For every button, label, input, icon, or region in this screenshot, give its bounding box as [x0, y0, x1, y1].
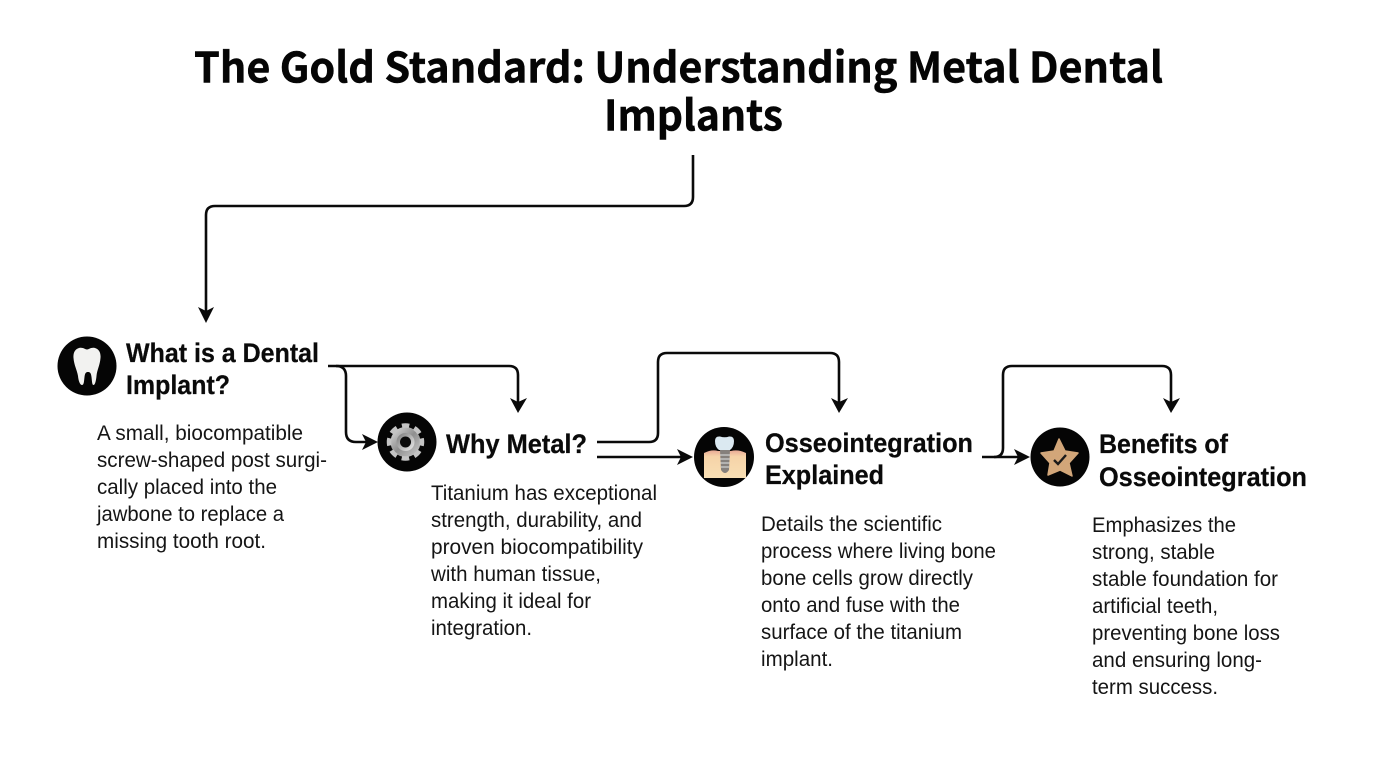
body text: screw-shaped post surgi-: [97, 449, 327, 472]
icon: star with check: [1030, 428, 1090, 486]
arrow: why metal to upper drop: [597, 353, 848, 442]
body text: [1092, 514, 1280, 699]
body text: strength, durability, and: [431, 509, 642, 532]
body text: Titanium has exceptional: [431, 482, 657, 505]
icon: gear: [378, 412, 436, 472]
body text: making it ideal for: [431, 590, 591, 613]
arrow: osseointegration to benefits icon: [982, 449, 1030, 465]
panel: why metal: [378, 412, 657, 640]
body text: term success.: [1092, 676, 1218, 699]
arrow: first step to upper drop: [328, 366, 527, 413]
body text: A small, biocompatible: [97, 422, 303, 445]
body text: artificial teeth,: [1092, 595, 1218, 618]
heading: Implant?: [126, 370, 230, 400]
body text: surface of the titanium: [761, 621, 962, 644]
body text: integration.: [431, 617, 532, 640]
panel: benefits of osseointegration: [1030, 428, 1307, 699]
body text: implant.: [761, 648, 833, 671]
heading: Why Metal?: [446, 429, 587, 459]
icon: implant in bone: [694, 427, 754, 487]
body text: cally placed into the: [97, 476, 277, 499]
icon: tooth: [58, 336, 116, 396]
heading: Osseointegration: [1099, 462, 1307, 492]
body text: jawbone to replace a: [96, 503, 284, 526]
body text: onto and fuse with the: [761, 594, 960, 617]
heading: What is a Dental: [126, 338, 319, 368]
body text: and ensuring long-: [1092, 649, 1262, 672]
body text: bone cells grow directly: [761, 567, 973, 590]
panel: osseointegration explained: [694, 427, 996, 671]
body text: missing tooth root.: [97, 530, 266, 553]
heading: Osseointegration: [765, 428, 973, 458]
heading: [765, 428, 973, 490]
body text: Details the scientific: [761, 513, 942, 536]
body text: strong, stable: [1092, 541, 1215, 564]
heading: Explained: [765, 460, 884, 490]
arrow: why metal to osseointegration icon: [597, 449, 693, 465]
body text: with human tissue,: [430, 563, 601, 586]
title: The Gold Standard: Understanding Metal Dental: [194, 34, 1163, 96]
body text: preventing bone loss: [1092, 622, 1280, 645]
title: [194, 34, 1163, 144]
heading: [126, 338, 319, 400]
body text: Emphasizes the: [1092, 514, 1236, 537]
body text: stable foundation for: [1092, 568, 1278, 591]
body text: [96, 422, 327, 553]
body text: [761, 513, 996, 671]
arrow: osseointegration to upper drop: [994, 366, 1180, 457]
panel: what is a dental implant: [58, 336, 327, 553]
title: Implants: [604, 82, 783, 144]
heading: [1099, 429, 1307, 492]
arrow: first step to why metal icon: [336, 366, 378, 450]
body text: process where living bone: [761, 540, 996, 563]
heading: Benefits of: [1099, 429, 1229, 459]
body text: [430, 482, 657, 640]
body text: proven biocompatibility: [431, 536, 643, 559]
arrow: title to first step: [198, 155, 693, 323]
